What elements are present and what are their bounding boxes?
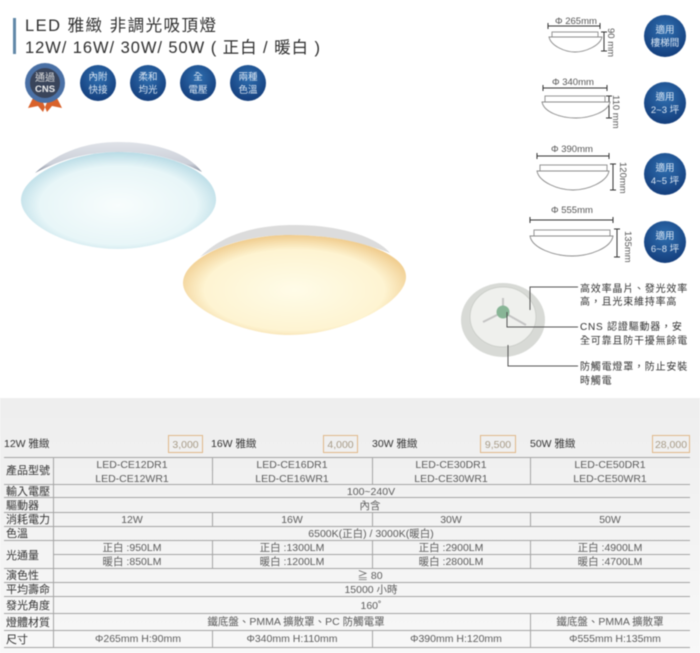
- row: model number: LED-CE30DR1: [415, 459, 487, 471]
- price header row: [4, 436, 690, 452]
- row: beam angle: 160˚: [360, 600, 382, 612]
- title block: LED 雅緻 非調光吸頂燈: [25, 16, 216, 35]
- lamp internals photo: [461, 283, 545, 357]
- dimension drawing: 265mm: 90 mm: [605, 28, 616, 57]
- dimension drawing: 340mm: [542, 77, 621, 129]
- badge: quick connect: 快接: [88, 84, 108, 96]
- row: model number: LED-CE16WR1: [255, 473, 329, 485]
- badge: quick connect: [80, 65, 116, 101]
- badge: 6-8 ping: 6~8 坪: [651, 243, 680, 255]
- callout: LED chip: 高，且光束維持率高: [580, 295, 677, 308]
- row: size: Φ265mm H:90mm: [95, 633, 181, 645]
- icon: CNS certification medal: 通過: [35, 71, 55, 84]
- row: colour rendering: ≧ 80: [357, 569, 383, 582]
- row: size: 尺寸: [6, 632, 28, 646]
- badge: stairwell: [644, 15, 686, 57]
- badge: stairwell: 樓梯間: [651, 37, 679, 49]
- header: 16W: [211, 436, 358, 452]
- header: 16W: 4,000: [327, 439, 354, 451]
- row: size: [6, 632, 661, 646]
- specification table: [4, 457, 690, 648]
- badge: 6-8 ping: [644, 221, 686, 263]
- row: average life: [6, 582, 398, 596]
- row: luminous flux: 正白 :4900LM: [578, 541, 642, 554]
- badge: 4-5 ping: 適用: [655, 162, 675, 174]
- row: luminous flux: 暖白 :2800LM: [419, 555, 483, 568]
- leader lines: [507, 287, 578, 366]
- header: 12W: 3,000: [172, 439, 199, 451]
- product photo: warm light lamp: [183, 225, 406, 335]
- background panel: specification area: [0, 398, 700, 653]
- badge: soft light: [130, 65, 166, 101]
- callout: CNS driver: [580, 320, 688, 347]
- row: luminous flux: 正白 :2900LM: [419, 541, 483, 554]
- feature badges: [80, 65, 266, 101]
- badge: 2-3 ping: 適用: [655, 91, 675, 103]
- row: model number: LED-CE50DR1: [574, 459, 646, 471]
- row: power: 50W: [599, 514, 621, 526]
- callout: LED chip: [580, 282, 688, 308]
- row: average life: 平均壽命: [6, 582, 50, 596]
- product photo: white light lamp: [21, 142, 216, 249]
- header: 30W: 30W 雅緻: [372, 437, 418, 450]
- header: 16W: 16W 雅緻: [211, 437, 257, 450]
- dimension drawing: 265mm: [548, 16, 616, 57]
- row: model number: LED-CE30WR1: [414, 473, 488, 485]
- row: luminous flux: 正白 :950LM: [103, 541, 161, 554]
- header: 30W: [372, 436, 516, 452]
- dimension drawing: 390mm: [537, 144, 628, 194]
- row: colour temperature: 6500K(正白) / 3000K(暖白): [308, 527, 434, 540]
- row: power: 16W: [281, 514, 303, 526]
- row: model number: 產品型號: [6, 463, 50, 477]
- row: driver: [6, 498, 381, 512]
- row: material: 燈體材質: [6, 615, 50, 629]
- badge: soft light: 柔和: [138, 72, 158, 83]
- header: 12W: [4, 436, 202, 452]
- icon: CNS certification medal: CNS: [35, 84, 55, 95]
- dimension drawing: 340mm: 110 mm: [610, 95, 621, 129]
- badge: full voltage: [180, 65, 216, 101]
- callout: CNS driver: 全可靠且防干擾無餘電: [580, 334, 688, 347]
- badge: 6-8 ping: 適用: [655, 230, 675, 242]
- row: material: 鐵底盤、PMMA 擴散罩: [556, 615, 664, 628]
- title block: 12W/ 16W/ 30W/ 50W ( 正白 / 暖白 ): [25, 38, 320, 57]
- row: average life: 15000 小時: [344, 584, 398, 596]
- row: size: Φ390mm H:120mm: [410, 633, 502, 645]
- badge: quick connect: 內附: [88, 71, 108, 83]
- row: input voltage: 100~240V: [347, 486, 395, 498]
- row: colour rendering: [6, 568, 383, 582]
- row: model number: LED-CE12WR1: [95, 473, 169, 485]
- badge: 4-5 ping: 4~5 坪: [651, 175, 680, 187]
- row: colour temperature: [6, 526, 434, 540]
- icon: CNS certification medal: [25, 63, 65, 112]
- callout: anti-shock cover: [580, 360, 688, 387]
- row: power: 30W: [440, 514, 462, 526]
- row: beam angle: 發光角度: [6, 598, 50, 612]
- row: luminous flux: 正白 :1300LM: [260, 541, 324, 554]
- header: 12W: 12W 雅緻: [4, 437, 50, 450]
- badge: full voltage: 電壓: [188, 85, 208, 96]
- badge: two colour temperatures: 色溫: [238, 84, 258, 96]
- row: luminous flux: 暖白 :850LM: [103, 555, 161, 568]
- row: beam angle: [6, 598, 382, 612]
- dimension drawing: 555mm: [530, 205, 633, 263]
- header: 50W: 28,000: [655, 439, 687, 451]
- row: size: Φ340mm H:110mm: [246, 633, 338, 645]
- callout: anti-shock cover: 防觸電燈罩，防止安裝: [580, 360, 688, 373]
- badge: two colour temperatures: 兩種: [238, 72, 258, 83]
- row: colour rendering: 演色性: [6, 568, 39, 582]
- row: power: 消耗電力: [6, 512, 50, 526]
- badge: 4-5 ping: [644, 153, 686, 195]
- row: model number: [6, 459, 647, 485]
- row: material: [6, 615, 664, 629]
- row: power: [6, 512, 621, 526]
- row: size: Φ555mm H:135mm: [569, 633, 661, 645]
- header: 50W: 50W 雅緻: [530, 437, 576, 450]
- dimension drawing: 390mm: 120mm: [617, 162, 628, 194]
- dimension drawing: 390mm: Φ 390mm: [551, 144, 593, 155]
- badge: 2-3 ping: 2~3 坪: [651, 104, 680, 116]
- callout: CNS driver: CNS 認證驅動器，安: [580, 320, 683, 333]
- row: model number: LED-CE16DR1: [256, 459, 328, 471]
- header: 50W: [530, 436, 690, 452]
- dimension drawing: 265mm: Φ 265mm: [555, 16, 597, 27]
- row: luminous flux: [6, 541, 642, 568]
- header: 30W: 9,500: [485, 439, 511, 451]
- row: colour temperature: 色溫: [6, 526, 28, 540]
- row: input voltage: [6, 484, 395, 498]
- badge: 2-3 ping: [644, 82, 686, 124]
- row: model number: LED-CE12DR1: [96, 459, 168, 471]
- row: driver: 驅動器: [6, 498, 39, 512]
- row: driver: 內含: [360, 499, 381, 512]
- dimension drawing: 555mm: 135mm: [622, 231, 633, 263]
- row: power: 12W: [121, 514, 143, 526]
- badge: soft light: 均光: [138, 84, 158, 96]
- dimension drawing: 555mm: Φ 555mm: [551, 205, 593, 216]
- row: material: 鐵底盤、PMMA 擴散罩、PC 防觸電罩: [207, 615, 385, 628]
- row: model number: LED-CE50WR1: [573, 473, 647, 485]
- row: luminous flux: 暖白 :4700LM: [578, 555, 642, 568]
- badge: full voltage: 全: [193, 72, 203, 83]
- row: input voltage: 輸入電壓: [6, 484, 50, 498]
- badge: stairwell: 適用: [655, 24, 675, 36]
- callout: LED chip: 高效率晶片、發光效率: [580, 282, 688, 295]
- badge: two colour temperatures: [230, 65, 266, 101]
- row: luminous flux: 暖白 :1200LM: [260, 555, 324, 568]
- row: luminous flux: 光通量: [6, 548, 39, 562]
- callout: anti-shock cover: 時觸電: [580, 374, 612, 387]
- dimension drawing: 340mm: Φ 340mm: [552, 77, 594, 88]
- title block: [13, 16, 320, 57]
